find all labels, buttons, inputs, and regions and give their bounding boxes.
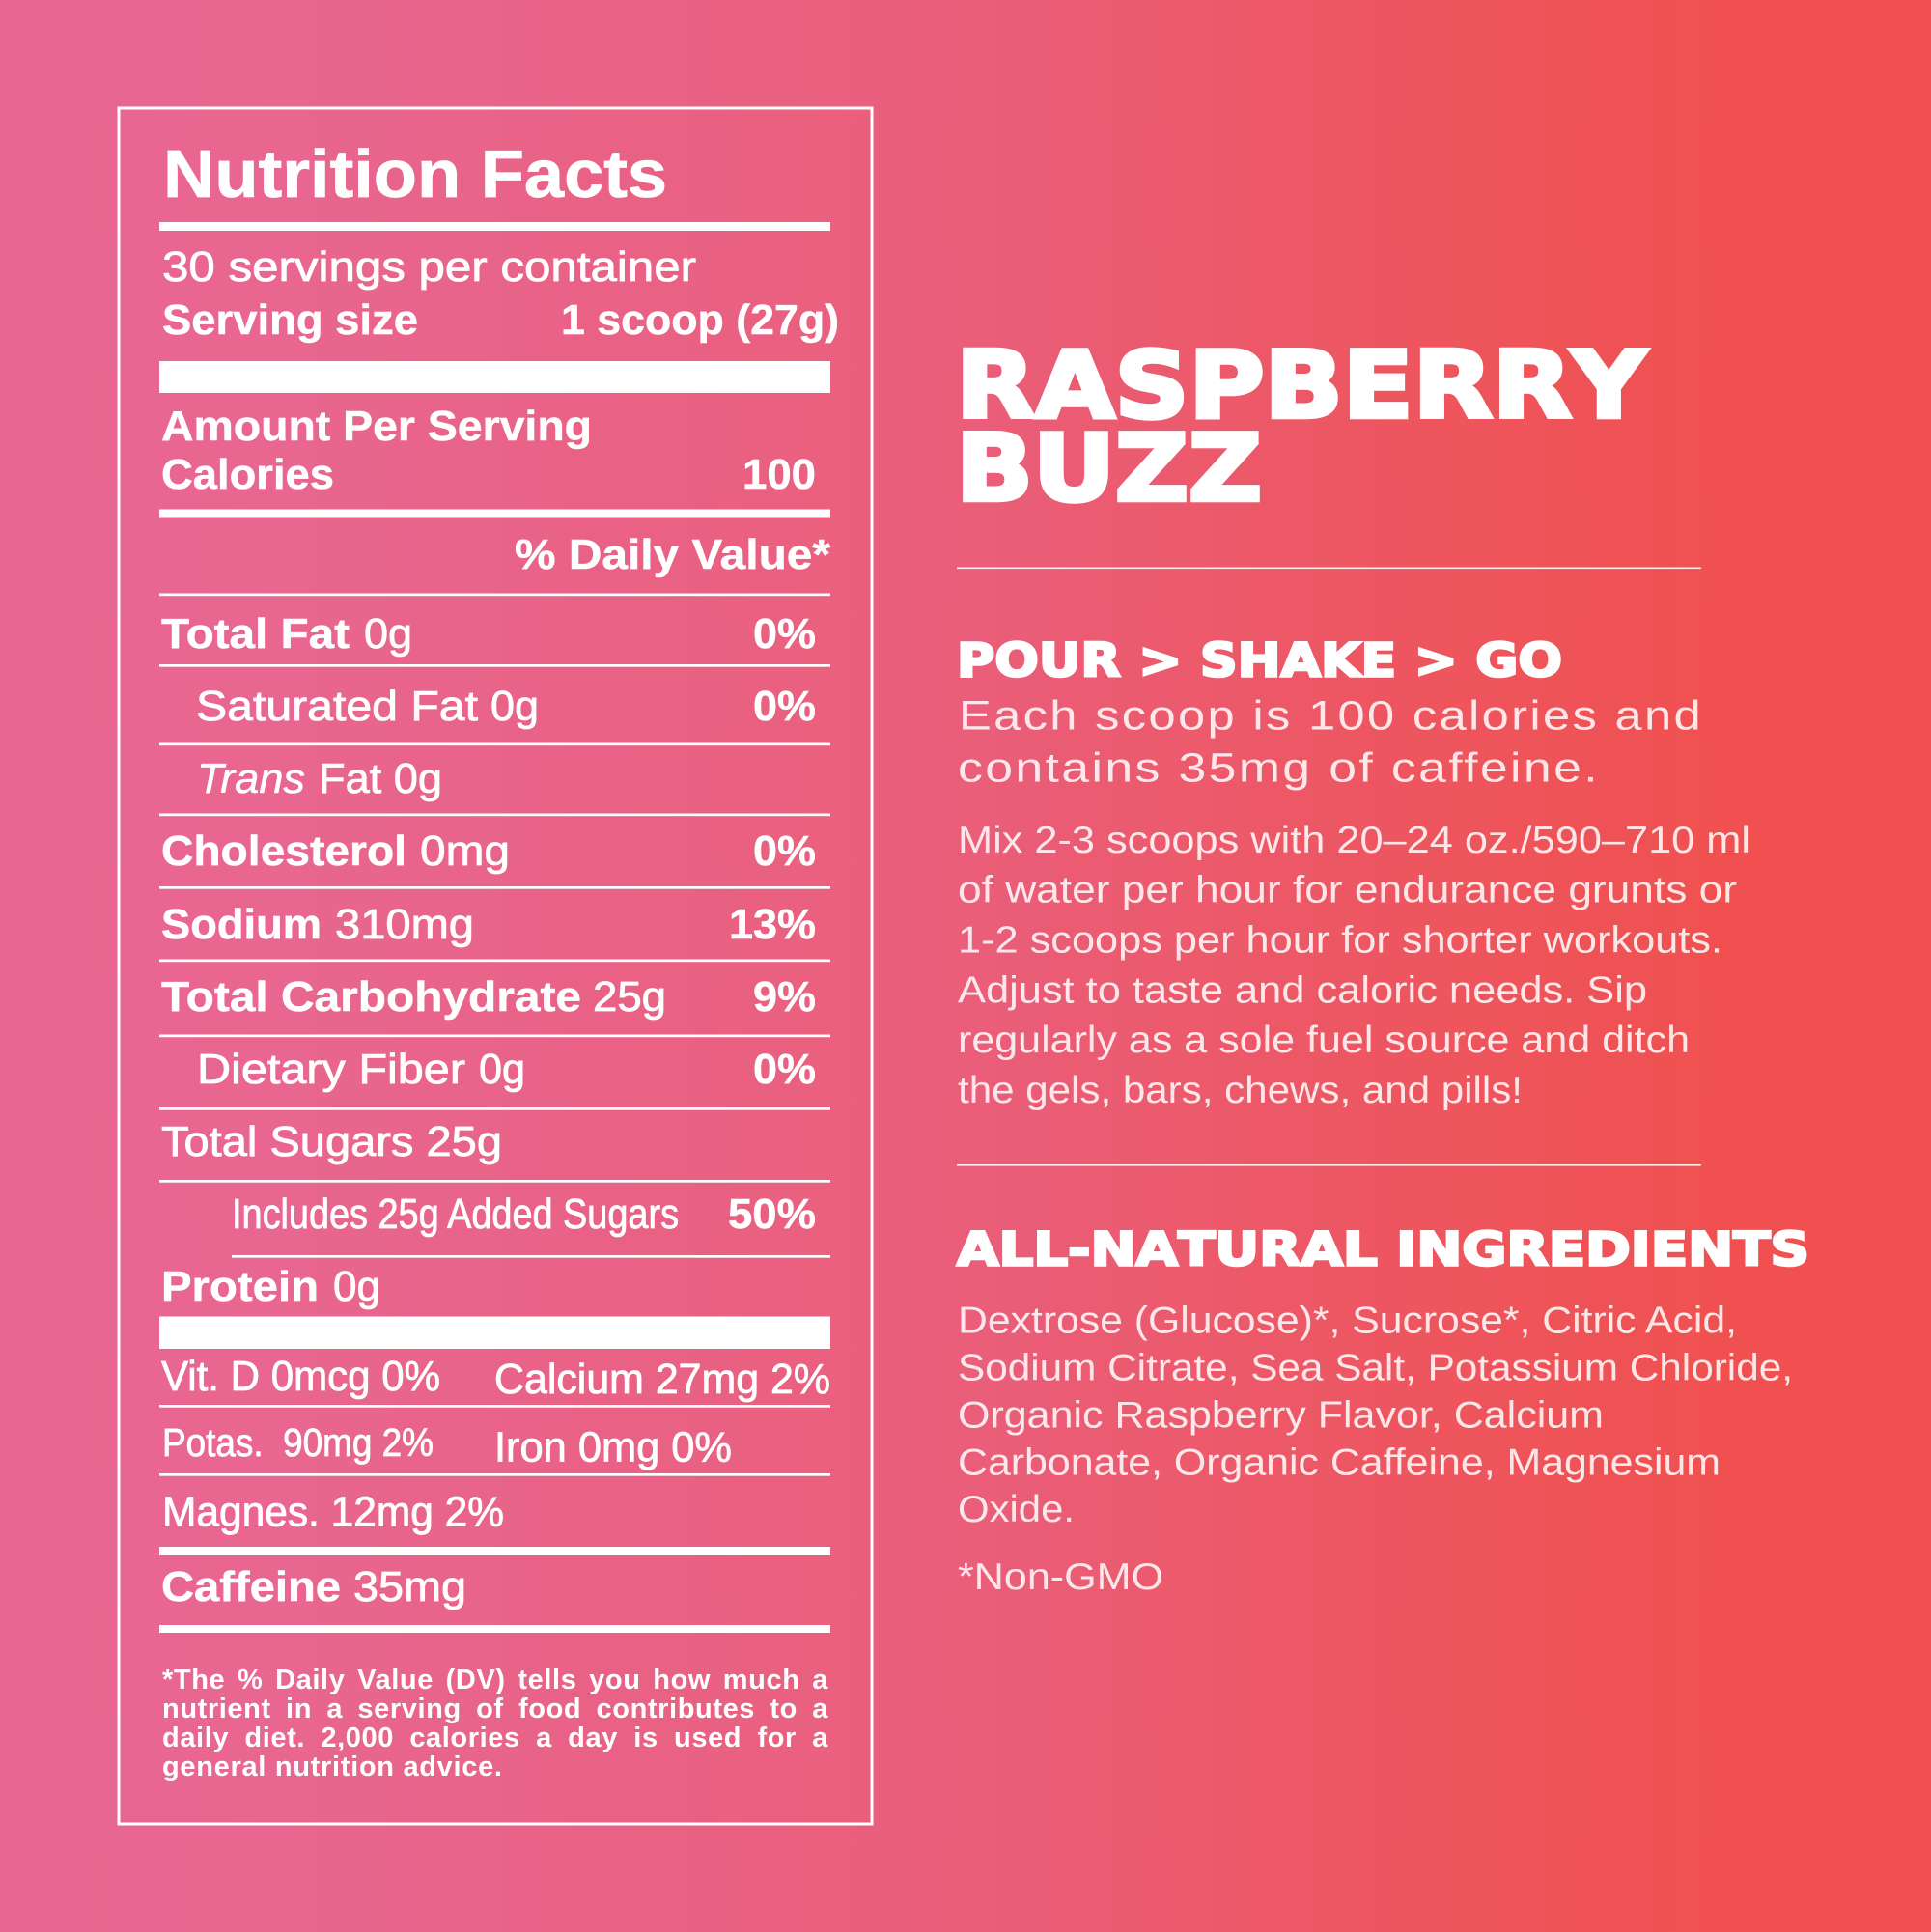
row: protein: 0g (333, 1263, 380, 1310)
row: trans fat: Fat 0g (319, 755, 442, 802)
row: potassium and iron (162, 1420, 732, 1471)
row: cholesterol: 0mg (420, 827, 510, 875)
row: serving size: 1 scoop (27g) (561, 296, 839, 344)
footnote: daily value explanation: general nutrition advice. (162, 1751, 503, 1782)
row: sodium: Sodium (161, 901, 322, 948)
title: Raspberry Buzz (956, 333, 1647, 522)
text block: mixing instructions: Mix 2-3 scoops with 20–24 oz./590–710 ml (958, 820, 1750, 861)
rule and bar group: nutrition panel rules (159, 222, 830, 1633)
row: potassium and iron: Potas. 90mg 2% (162, 1420, 434, 1465)
row: caffeine: Caffeine (161, 1563, 341, 1610)
row: saturated fat: 0g (490, 683, 539, 730)
row: caffeine: 35mg (353, 1563, 466, 1610)
text block: ingredients list: Dextrose (Glucose)*, Sucrose*, Citric Acid, (958, 1300, 1737, 1342)
row: total sugars: Total Sugars 25g (161, 1118, 502, 1165)
row: calories: Calories (161, 451, 334, 498)
row: sodium: 310mg (335, 901, 474, 948)
row: cholesterol (161, 827, 816, 875)
row: sodium: 13% (729, 901, 816, 948)
row: saturated fat: 0% (753, 683, 816, 730)
row: potassium and iron: Iron 0mg 0% (494, 1423, 732, 1471)
row: total carbohydrate: 25g (593, 973, 666, 1021)
footnote: daily value explanation: nutrient in a serving of food contributes to a (162, 1694, 828, 1724)
row: total fat: 0g (364, 610, 412, 658)
row: serving size (162, 296, 839, 344)
text: amount per serving: Amount Per Serving (161, 403, 592, 450)
subhead: scoop calories and caffeine: contains 35mg of caffeine. (958, 745, 1600, 792)
text block: ingredients list: Carbonate, Organic Caffeine, Magnesium (958, 1442, 1721, 1483)
row: saturated fat (196, 683, 816, 730)
text block: ingredients list: Oxide. (958, 1489, 1075, 1530)
text block: mixing instructions: Adjust to taste and caloric needs. Sip (958, 969, 1647, 1012)
row: vitamin D and calcium: Vit. D 0mcg 0% (161, 1353, 440, 1400)
row: calories: 100 (742, 451, 816, 498)
row: total carbohydrate: 9% (753, 973, 816, 1021)
row: cholesterol: Cholesterol (161, 827, 406, 875)
footnote: daily value explanation: *The % Daily Value (DV) tells you how much a (162, 1665, 828, 1695)
text block: mixing instructions: of water per hour for endurance grunts or (958, 869, 1737, 911)
row: added sugars: Includes 25g Added Sugars (232, 1190, 679, 1238)
footnote: daily value explanation (162, 1665, 828, 1782)
text block: mixing instructions: the gels, bars, chews, and pills! (958, 1070, 1523, 1111)
title: Raspberry Buzz: BUZZ (956, 416, 1262, 522)
text block: mixing instructions: regularly as a sole fuel source and ditch (958, 1020, 1690, 1061)
heading: all-natural ingredients: ALL-NATURAL INGREDIENTS (957, 1222, 1809, 1276)
row: total fat (161, 610, 816, 658)
row: added sugars: 50% (728, 1190, 816, 1238)
panel: nutrition facts frame (119, 108, 872, 1824)
row: dietary fiber (197, 1046, 816, 1093)
row: total carbohydrate (161, 973, 816, 1021)
row: caffeine (161, 1563, 466, 1610)
divider (957, 568, 1701, 569)
row: protein: Protein (161, 1263, 319, 1310)
text block: ingredients list (958, 1300, 1793, 1530)
row: protein (161, 1263, 380, 1310)
row: trans fat (197, 755, 442, 802)
row: dietary fiber: 0% (753, 1046, 816, 1093)
row: sodium (161, 901, 816, 948)
text: percent daily value header: % Daily Value* (515, 531, 831, 578)
text: servings per container: 30 servings per container (162, 243, 696, 291)
row: saturated fat: Saturated Fat (196, 683, 478, 730)
row: total fat: Total Fat (161, 610, 350, 658)
text block: mixing instructions: 1-2 scoops per hour for shorter workouts. (958, 919, 1722, 962)
row: total carbohydrate: Total Carbohydrate (161, 973, 581, 1021)
row: cholesterol: 0% (753, 827, 816, 875)
row: trans fat: Trans (197, 755, 305, 802)
row: vitamin D and calcium: Calcium 27mg 2% (494, 1356, 830, 1403)
row: total fat: 0% (753, 610, 816, 658)
title: Raspberry Buzz: RASPBERRY (956, 333, 1647, 439)
row: vitamin D and calcium (161, 1353, 830, 1403)
text block: ingredients list: Organic Raspberry Flavor, Calcium (958, 1394, 1604, 1437)
footnote: daily value explanation: daily diet. 2,000 calories a day is used for a (162, 1722, 828, 1753)
row: calories (161, 451, 816, 498)
row: dietary fiber: Dietary Fiber (197, 1046, 465, 1093)
row: magnesium: Magnes. 12mg 2% (162, 1489, 504, 1535)
row: serving size: Serving size (162, 296, 418, 344)
text block: ingredients list: Sodium Citrate, Sea Salt, Potassium Chloride, (958, 1348, 1793, 1388)
subhead: scoop calories and caffeine: Each scoop is 100 calories and (959, 693, 1703, 740)
subhead: scoop calories and caffeine (958, 693, 1703, 792)
footnote: non-GMO: *Non-GMO (958, 1556, 1163, 1598)
heading: Nutrition Facts: Nutrition Facts (163, 136, 667, 211)
text block: mixing instructions (958, 820, 1750, 1111)
divider (957, 1164, 1701, 1166)
heading: pour shake go: POUR > SHAKE > GO (957, 633, 1562, 687)
row: dietary fiber: 0g (479, 1046, 525, 1093)
